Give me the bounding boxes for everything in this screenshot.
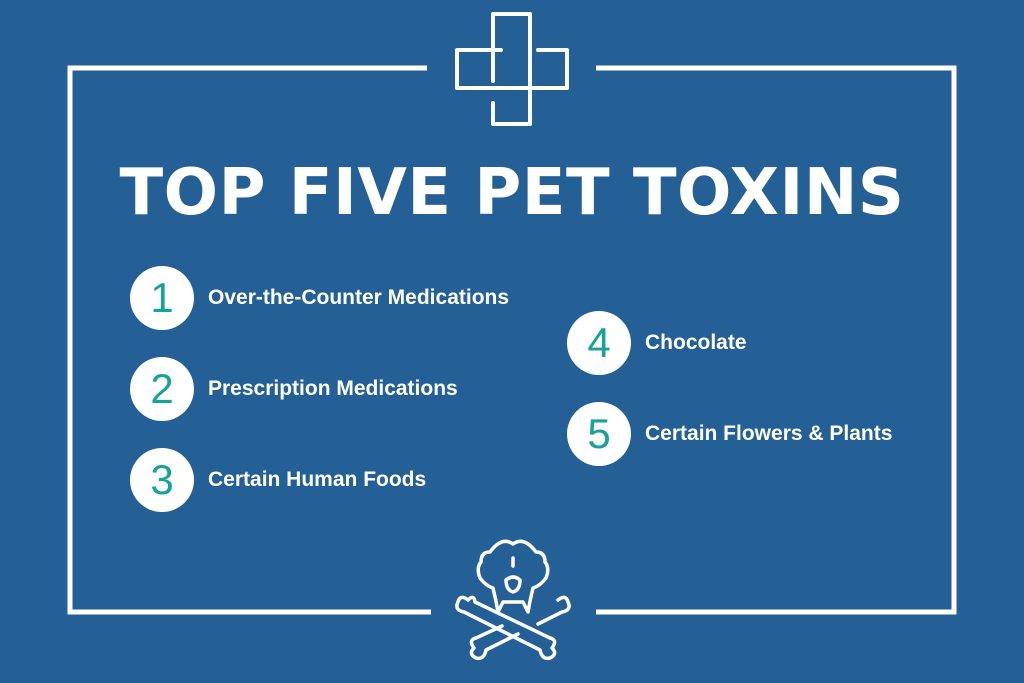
item 2: Prescription Medications xyxy=(208,377,458,400)
item 3: Certain Human Foods xyxy=(208,468,426,491)
item 5: 5 xyxy=(587,410,611,457)
item 5 xyxy=(567,402,892,466)
item 5: Certain Flowers & Plants xyxy=(645,422,892,445)
item 3: 3 xyxy=(150,456,174,503)
item 2 xyxy=(130,357,458,421)
item 4: 4 xyxy=(587,319,611,366)
item 1 xyxy=(130,266,509,330)
icon: medical cross xyxy=(455,12,569,126)
item 1: Over-the-Counter Medications xyxy=(208,286,509,309)
item 2: 2 xyxy=(150,365,174,412)
item 1: 1 xyxy=(150,274,174,321)
icon: skull and crossbones xyxy=(455,540,571,660)
title: TOP FIVE PET TOXINS xyxy=(120,156,904,230)
item 4 xyxy=(567,311,747,375)
item 4: Chocolate xyxy=(645,331,747,354)
item 3 xyxy=(130,448,426,512)
